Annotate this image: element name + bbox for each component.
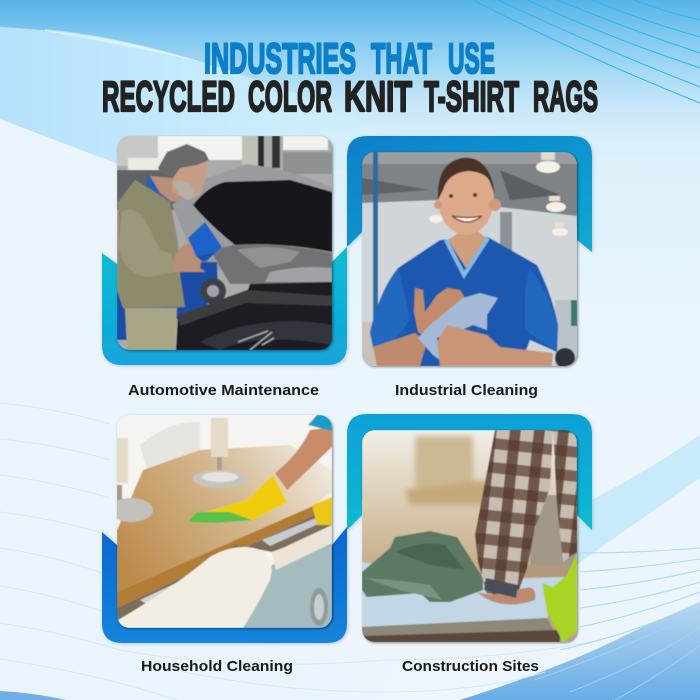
panel: industrial cleaning (347, 136, 592, 399)
panel frame (347, 414, 592, 530)
heading line 2: COLOR (248, 73, 332, 121)
panel frame (347, 136, 592, 252)
heading line 2: T-SHIRT (424, 73, 519, 121)
panel frame (102, 527, 347, 643)
heading line 2: KNIT (344, 73, 412, 121)
label: Automotive Maintenance (128, 382, 319, 399)
heading line 1: USE (448, 35, 495, 83)
heading line 2: RAGS (533, 73, 598, 121)
photo: wiping dining table with yellow gloves (109, 415, 332, 628)
photo: mechanic with blue rag (117, 136, 332, 350)
panel frame (102, 247, 347, 365)
label: Household Cleaning (141, 658, 293, 675)
heading line 2: RECYCLED (102, 73, 235, 121)
title (102, 35, 598, 121)
heading line 1: THAT (371, 35, 432, 83)
panel: household cleaning (102, 415, 347, 675)
panel: automotive maintenance (102, 136, 347, 399)
heading line 1: INDUSTRIES (204, 35, 356, 83)
heading line 2 (102, 73, 598, 121)
photo: worker wiping hands (362, 152, 577, 368)
label: Construction Sites (402, 658, 539, 675)
label: Industrial Cleaning (395, 382, 538, 399)
panel: construction sites (347, 414, 592, 675)
photo: construction worker with green rag (362, 430, 577, 642)
